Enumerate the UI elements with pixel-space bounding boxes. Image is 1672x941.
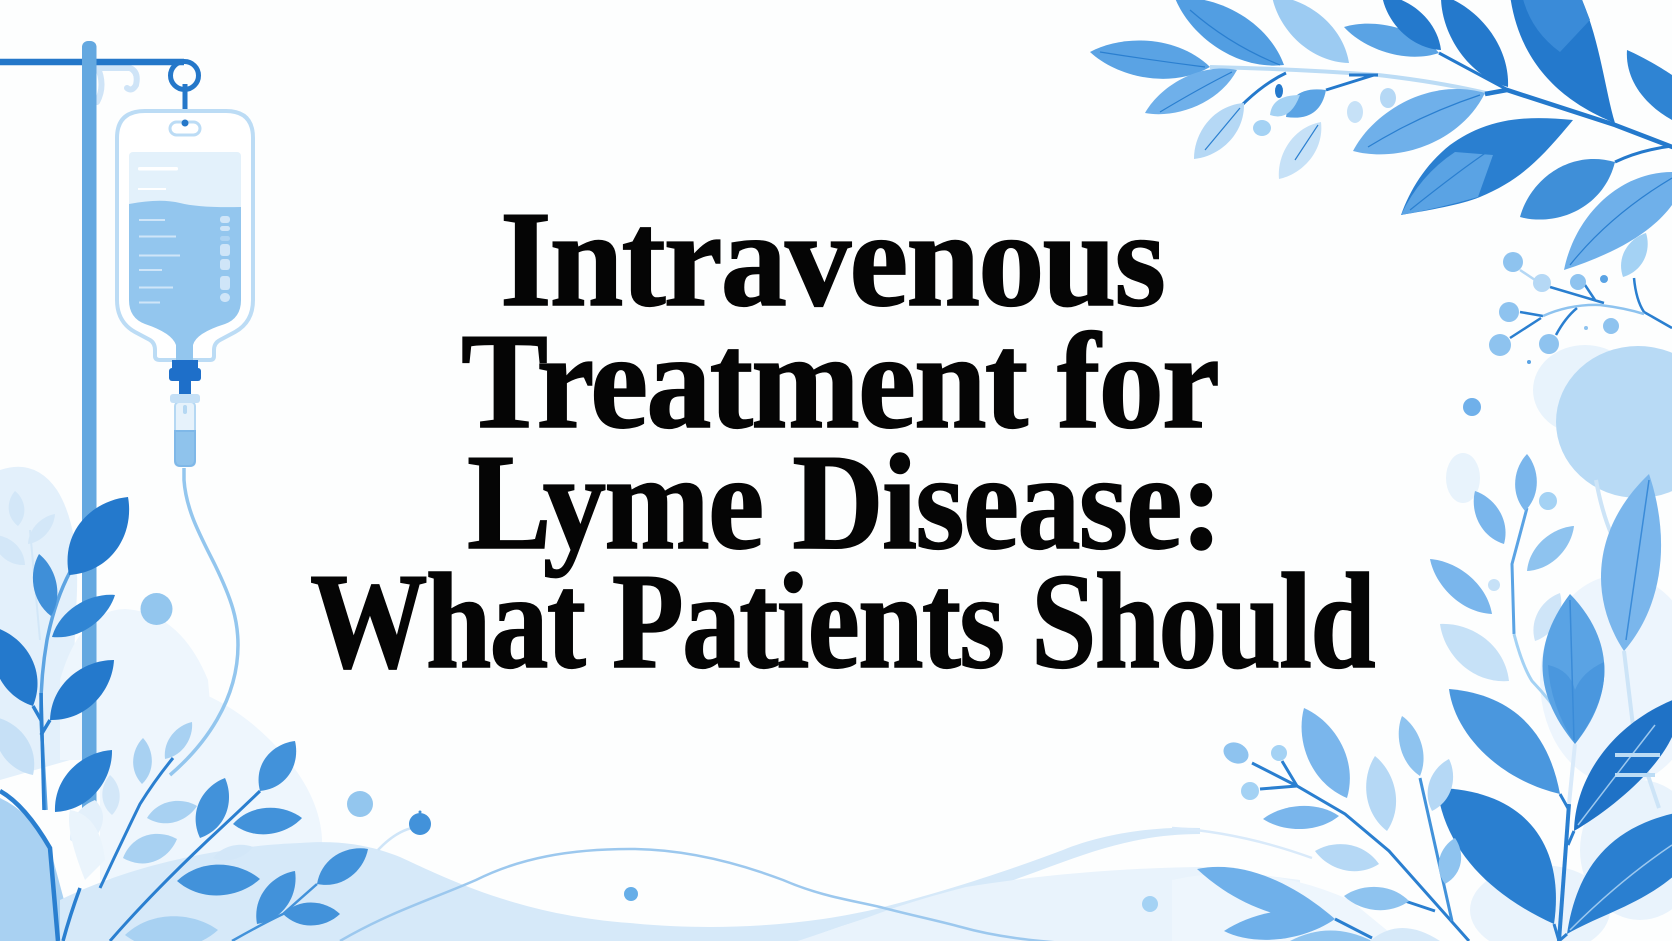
- background wash shapes: bottom left: [0, 467, 1300, 941]
- graduation marks: [138, 167, 230, 304]
- bag outline: [117, 111, 253, 360]
- IV tube: [170, 468, 238, 775]
- top right foliage: [1088, 0, 1672, 282]
- light leaves: [118, 717, 255, 941]
- liquid: [129, 201, 241, 360]
- leaf veins: [1100, 10, 1672, 265]
- lower branch leaves: [1197, 700, 1466, 941]
- hanger stem: [182, 84, 188, 111]
- branch: [1210, 53, 1672, 162]
- connector: [169, 360, 201, 394]
- lone dot: [1463, 398, 1481, 416]
- title line 2: Treatment for: [461, 305, 1218, 457]
- horizontal arm: [0, 59, 184, 65]
- pale background leaves: [0, 490, 121, 850]
- hook ring: [170, 62, 198, 90]
- empty upper bag panel: [129, 152, 241, 212]
- berries sprig right: [1463, 252, 1672, 416]
- upper branch leaves: [1421, 454, 1661, 695]
- lower leaves: [1138, 56, 1672, 282]
- bottom right foliage: [1197, 454, 1672, 941]
- decorative wave line: [340, 849, 1063, 941]
- dark stems: [0, 572, 412, 941]
- dark leaves: [0, 483, 146, 824]
- IV stand: [0, 41, 198, 813]
- IV bag: [117, 84, 253, 466]
- hanger slot: [170, 122, 200, 135]
- drip chamber: [170, 394, 200, 466]
- large leaves: [1437, 594, 1672, 934]
- vertical pole: [82, 41, 96, 813]
- pale translucent leaf at lower stem: [69, 810, 105, 880]
- lower branch berries: [1220, 738, 1287, 800]
- bottom left foliage: [0, 483, 412, 941]
- buds: [1253, 84, 1396, 136]
- dots and berries bottom: [140, 593, 1158, 912]
- pale side stem: [1596, 480, 1659, 808]
- title line 3: Lyme Disease:: [467, 426, 1221, 578]
- slot pin: [182, 120, 188, 126]
- wave line upper right section: [1172, 828, 1312, 858]
- mid blue leaves: [177, 733, 375, 932]
- background wash shapes: right side: [1172, 345, 1672, 941]
- title: [310, 183, 1375, 697]
- pale hook on pole: [96, 66, 137, 102]
- stems: [1252, 508, 1575, 941]
- large leaf veins: [1570, 480, 1672, 930]
- title line 4: What Patients Should: [310, 545, 1375, 697]
- title line 1: Intravenous: [500, 183, 1164, 335]
- upper leaves: [1088, 0, 1672, 123]
